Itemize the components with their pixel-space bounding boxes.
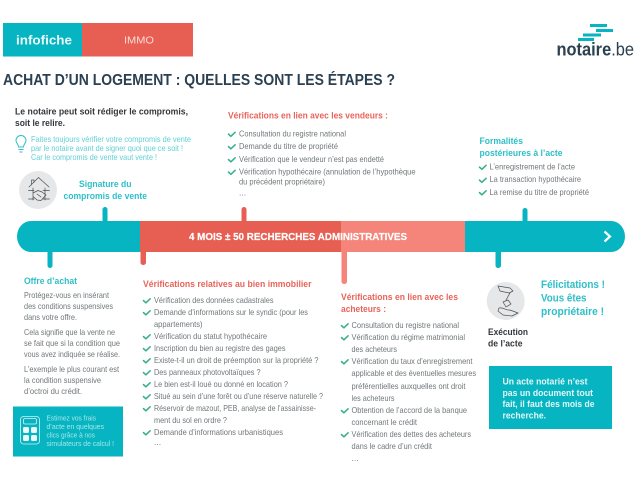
panel: formalités postérieures [480,136,589,197]
callout: acte notarié: pas un document tout [502,388,594,399]
list: Obtention de l’accord de la banque [352,405,467,415]
callout: acte notarié: fait, il faut des mois de [502,399,594,410]
list: ... [239,188,246,198]
callout text: simulateurs de calcul ! [46,439,114,448]
timeline bar with connectors [17,207,625,284]
list: Vérification hypothécaire (annulation de l’hypothèque [239,166,416,176]
icon: chevron [604,232,610,242]
body text: Cela signifie que la vente ne [24,327,115,337]
logo: notaire.be [556,24,634,60]
list: ment du sol en ordre ? [154,415,227,425]
list: ... [154,437,161,447]
callout: simulateurs de calcul [13,406,123,456]
callout text: clics grâce à nos [46,430,95,440]
callout: acte notarié: Un acte notarié n’est [502,376,588,388]
tip text: par le notaire avant de signer quoi que ce soit ! [31,143,183,153]
body text [24,290,120,396]
label: signature du compromis: Signature du [79,179,132,190]
body text: Protégez-vous en insérant [24,290,110,300]
list: Réservoir de mazout, PEB, analyse de l’assainisse- [154,403,316,413]
label: exécution de l'acte: Exécution [488,327,528,337]
list: Vérification du régime matrimonial [352,332,465,342]
intro text: Le notaire peut soit rédiger le compromis, [15,106,188,116]
body text: L’exemple le plus courant est [24,364,120,374]
callout text: Estimez vos frais [46,414,96,422]
icon: keys in hand [487,282,525,320]
panel: offre d'achat [24,276,120,396]
list: applicable et des éventuelles mesures [352,368,476,378]
panel: vérifications acheteurs [341,292,476,463]
body text: dans votre offre. [24,312,77,322]
list: dans le cadre d’un crédit [352,441,433,451]
list: Demande du titre de propriété [239,141,338,151]
heading: Vérifications en lien avec les vendeurs : [228,110,388,122]
list: La transaction hypothécaire [490,174,581,184]
list: Des panneaux photovoltaïques ? [154,367,261,377]
list: ... [352,453,359,463]
callout text: d’acte en quelques [46,422,104,431]
list: Inscription du bien au registre des gages [154,343,286,353]
logo: notaire.be: notaire.be [556,40,634,60]
body text: des conditions suspensives [24,301,113,311]
callout: acte notarié: recherche. [502,410,546,422]
header badge: infofiche IMMO: infofiche [16,32,72,48]
timeline bar with connectors: 4 MOIS ± 50 RECHERCHES ADMINISTRATIVES [189,232,407,243]
félicitations: Vous êtes [541,292,586,304]
label: signature du compromis [64,179,147,202]
list: Vérification du statut hypothécaire [154,331,267,341]
félicitations: Félicitations ! [541,279,605,291]
list: Situé au sein d’une forêt ou d’une réserve naturelle ? [154,391,323,401]
list: Existe-t-il un droit de préemption sur la propriété ? [154,355,319,365]
title: ACHAT D’UN LOGEMENT : QUELLES SONT LES ÉTAPES ? [3,70,395,89]
body text: la condition suspensive [24,375,101,385]
callout text [46,414,114,448]
list [144,295,323,447]
list: Vérification que le vendeur n’est pas endetté [239,154,384,164]
header badge: infofiche IMMO: IMMO [124,34,154,46]
heading [480,136,562,159]
list: les acheteurs [352,393,394,403]
list: Vérification des dettes des acheteurs [352,429,471,439]
list: concernant le crédit [352,417,418,427]
label: exécution de l'acte [488,327,528,348]
intro text: soit le relire. [15,118,65,128]
tip text: Faites toujours vérifier votre compromis de vente [31,134,191,144]
body text: d’octroi du crédit. [24,386,82,396]
list: Le bien est-il loué ou donné en location ? [154,379,288,389]
icon: light bulb [16,136,26,152]
list: des acheteurs [352,344,397,354]
list [228,128,416,198]
panel: vérifications bien immobilier [143,279,323,447]
list: appartements) [154,319,203,329]
heading: Vérifications relatives au bien immobilier [143,279,312,290]
félicitations: propriétaire ! [541,306,604,318]
icon: calculator [20,416,40,444]
list: Consultation du registre national [239,128,346,138]
heading: Offre d’achat [24,276,78,287]
tip text: Car le compromis de vente vaut vente ! [31,152,157,162]
list: préférentielles auxquelles ont droit [352,381,466,391]
list: Demande d’informations sur le syndic (pour les [154,307,308,317]
panel: vérifications vendeurs [228,110,416,198]
list: Vérification du taux d’enregistrement [352,356,473,366]
heading: Vérifications en lien avec les [341,292,458,303]
intro text [15,106,188,128]
list [342,320,476,463]
heading: Formalités [480,136,523,147]
icon: house and handshake [19,171,57,209]
heading [341,292,458,315]
body text: se fait que si la condition que [24,338,120,348]
list: du précédent propriétaire) [239,176,325,186]
list: Vérification des données cadastrales [154,295,274,305]
list: Demande d’informations urbanistiques [154,427,283,437]
list: Consultation du registre national [352,320,459,330]
header badge: infofiche IMMO [3,23,193,56]
body text: vous avez indiquée se réalise. [24,349,120,359]
callout: acte notarié [489,366,612,429]
list: La remise du titre de propriété [490,187,589,197]
label: exécution de l'acte: de l’acte [488,338,522,348]
heading: acheteurs : [341,304,386,315]
félicitations [541,279,605,318]
heading: postérieures à l’acte [480,148,562,159]
label: signature du compromis: compromis de vente [64,191,147,202]
tip text [31,134,191,162]
list [480,162,589,197]
list: L’enregistrement de l’acte [490,162,575,172]
